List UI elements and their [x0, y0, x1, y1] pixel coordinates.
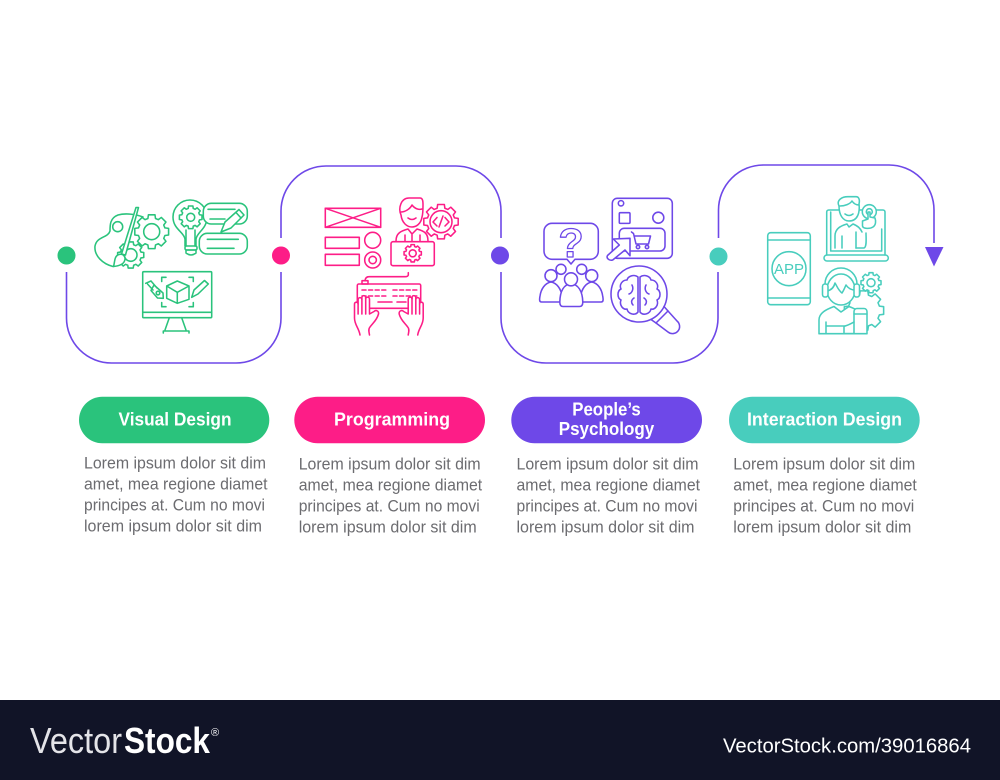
icon: programming: [325, 198, 458, 335]
pill: interaction design: [729, 397, 920, 443]
text block: programming: [299, 456, 483, 536]
text block: visual design: Lorem ipsum dolor sit dim: [84, 455, 266, 473]
magnifier with brain: [611, 266, 680, 334]
laptop with person: [824, 197, 888, 261]
pill: visual design: [79, 397, 269, 443]
text block: people's psychology: lorem ipsum dolor sit dim: [516, 518, 694, 536]
text block: programming: principes at. Cum no movi: [299, 498, 480, 516]
light bulb: [173, 200, 207, 255]
developer with laptop and code gear: [391, 198, 458, 266]
wireframe: [325, 208, 381, 268]
text block: people's psychology: [516, 456, 700, 536]
pill: people's psychology: People’s: [572, 400, 641, 420]
text block: visual design: principes at. Cum no movi: [84, 497, 265, 515]
icon: visual design: [95, 200, 247, 333]
pill: people's psychology: Psychology: [559, 419, 654, 439]
text block: programming: amet, mea regione diamet: [299, 476, 483, 494]
footer bar: [0, 700, 1000, 780]
product card with cart and cursor: [607, 198, 672, 260]
timeline dots: [58, 246, 728, 266]
pill: people's psychology: [511, 397, 702, 443]
text block: interaction design: amet, mea regione diamet: [733, 476, 917, 494]
text block: interaction design: lorem ipsum dolor sit dim: [733, 518, 911, 536]
pill: programming: Programming: [334, 410, 450, 430]
footer image id: VectorStock.com/39016864: [723, 736, 971, 758]
footer logo: ®: [211, 727, 219, 739]
text block: interaction design: principes at. Cum no movi: [733, 498, 914, 516]
pill: visual design: Visual Design: [118, 410, 232, 430]
text block: people's psychology: principes at. Cum no movi: [516, 498, 698, 516]
speech bubble with question mark: ?: [558, 220, 584, 266]
text block: visual design: amet, mea regione diamet: [84, 476, 268, 494]
footer logo: Stock: [124, 720, 211, 761]
text block: interaction design: [733, 456, 917, 536]
message bubbles and pencil: [199, 203, 247, 254]
text block: people's psychology: Lorem ipsum dolor sit dim: [516, 456, 698, 474]
text block: visual design: [84, 455, 268, 536]
support agent with gears: [819, 268, 884, 334]
text block: programming: Lorem ipsum dolor sit dim: [299, 456, 481, 474]
winding timeline path: [66, 165, 934, 363]
keyboard and hands: [354, 273, 423, 335]
text block: visual design: lorem ipsum dolor sit dim: [84, 518, 262, 536]
arrow head: [925, 247, 944, 266]
pill: interaction design: Interaction Design: [747, 410, 902, 430]
text block: programming: lorem ipsum dolor sit dim: [299, 518, 477, 536]
speech bubble with question mark: [544, 220, 598, 266]
text block: interaction design: Lorem ipsum dolor sit dim: [733, 456, 915, 474]
text block: people's psychology: amet, mea regione diamet: [516, 476, 700, 494]
icon: people's psychology: [540, 198, 680, 334]
monitor with cube: [143, 272, 212, 333]
footer logo: [30, 720, 219, 761]
group of people: [540, 264, 603, 306]
icon: interaction design: [768, 197, 888, 334]
footer logo: Vector: [30, 720, 122, 761]
pill: programming: [294, 397, 485, 443]
palette with gears: [95, 208, 169, 268]
mobile app: APP: [774, 261, 804, 278]
